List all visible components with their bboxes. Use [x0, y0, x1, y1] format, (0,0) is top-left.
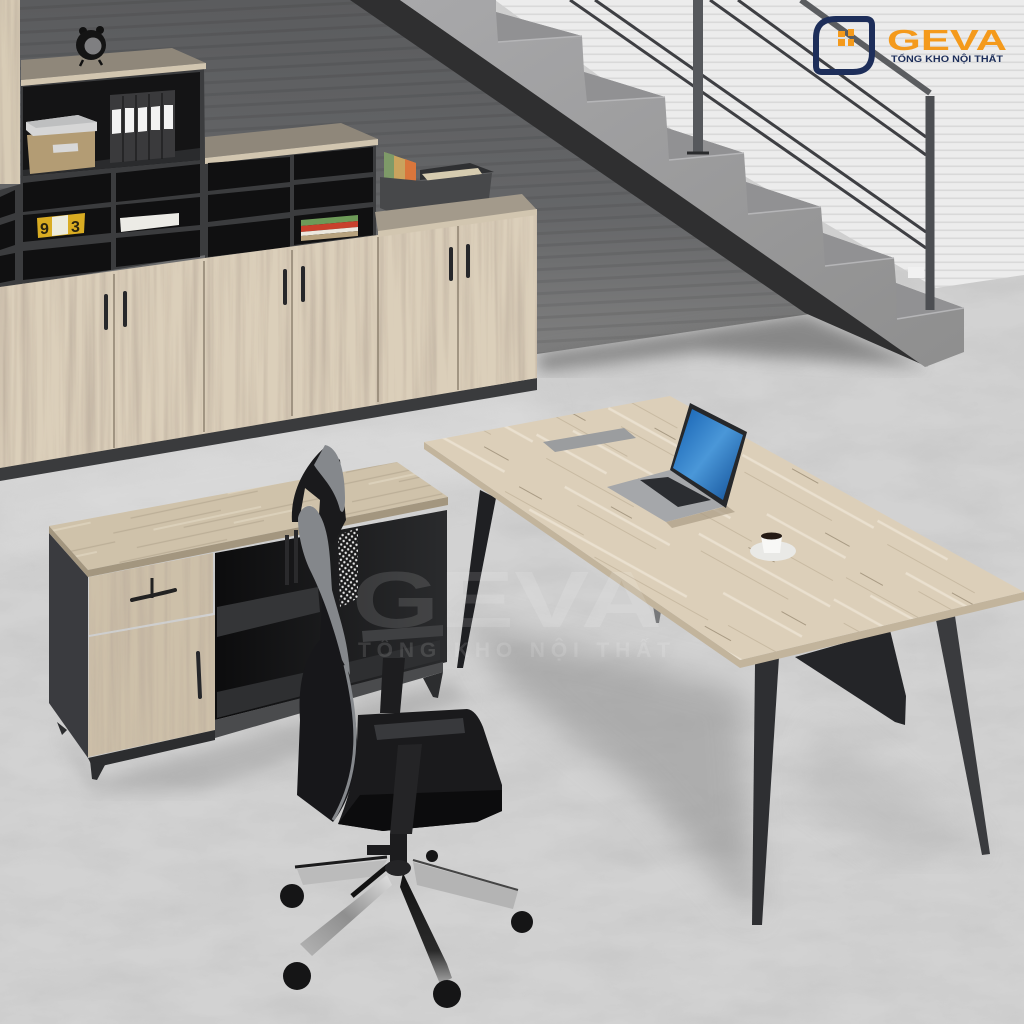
open top bay — [23, 72, 200, 176]
tall wood side panel — [0, 0, 20, 184]
bay floor — [23, 148, 200, 176]
storage box — [26, 115, 97, 174]
right leg — [413, 862, 518, 909]
drawer — [89, 553, 213, 635]
shelf unit middle — [205, 123, 378, 258]
laptop base — [607, 470, 726, 522]
seat — [338, 709, 502, 831]
monitor clamp — [287, 530, 296, 585]
side cabinet — [49, 462, 470, 790]
feet — [57, 672, 443, 780]
back small leg — [653, 606, 662, 623]
cabinet floor shadow — [60, 680, 470, 790]
screen — [673, 409, 743, 500]
tread nosing highlights — [498, 36, 964, 319]
cabinet top right — [375, 194, 537, 232]
chair base — [295, 834, 518, 984]
alarm clock — [76, 26, 106, 66]
keyboard — [640, 477, 711, 507]
bay floor — [217, 640, 440, 718]
casters — [280, 850, 533, 1008]
left side panel — [49, 533, 88, 758]
wall outlet — [908, 267, 924, 278]
tray body — [380, 173, 492, 219]
upright magazines — [384, 152, 416, 185]
cable grommet — [543, 428, 636, 452]
lumbar back — [297, 585, 357, 822]
cabinet front — [0, 214, 537, 468]
door seams — [114, 226, 458, 448]
binders — [110, 90, 175, 163]
lock — [150, 578, 154, 598]
desktop — [424, 396, 1024, 660]
screen lid — [670, 403, 747, 508]
logo wordmark: GEVA — [887, 25, 1007, 57]
cabinet top right front edge — [378, 209, 537, 237]
stair treads — [496, 12, 964, 319]
digital counter — [37, 213, 85, 238]
shelf top — [21, 48, 206, 80]
headrest frame — [292, 447, 346, 545]
left leg — [297, 860, 387, 885]
middle shelf top — [205, 123, 378, 158]
stair railing — [570, 0, 930, 310]
stair stringer — [350, 0, 928, 367]
office chair — [280, 445, 533, 1008]
modesty panel — [795, 630, 906, 725]
front left leg — [300, 875, 392, 956]
backrest mesh — [298, 506, 350, 675]
upper pad — [362, 625, 443, 642]
middle shelf body — [205, 145, 376, 258]
wall: dark cladding under stairs — [0, 0, 810, 354]
desk shadow on floor — [470, 620, 985, 920]
digital counter: 9 — [40, 221, 49, 238]
books — [301, 215, 358, 241]
front leg — [400, 873, 452, 984]
desk — [424, 396, 1024, 925]
middle cubbies — [208, 147, 373, 257]
shelf unit left — [0, 26, 206, 288]
inner shelf — [217, 587, 320, 637]
laptop — [607, 403, 747, 528]
shadow beneath stairs — [537, 314, 925, 372]
arm pad — [374, 718, 465, 740]
middle shelf top front edge — [205, 139, 378, 164]
drawer handle — [132, 590, 175, 600]
door handles — [106, 246, 468, 328]
laptop shadow — [666, 506, 735, 528]
arm post — [390, 744, 422, 834]
bracket — [367, 845, 405, 855]
right leg — [936, 616, 990, 855]
back rim — [333, 665, 355, 820]
desk edge — [424, 442, 1024, 668]
shelf body — [0, 68, 206, 288]
tray interior — [420, 163, 494, 180]
stacked white book — [120, 213, 179, 232]
long wood cabinet — [0, 194, 537, 481]
door handle — [198, 653, 200, 697]
floor — [0, 270, 1024, 1024]
upright spine — [380, 658, 405, 713]
cubbies — [0, 164, 200, 283]
door — [88, 615, 215, 757]
grey storage tray with magazines — [380, 152, 494, 219]
watermark: GEVA — [352, 555, 662, 644]
headrest — [314, 445, 345, 512]
stair body — [400, 0, 964, 367]
shelf top front edge — [21, 63, 206, 86]
logo squares — [838, 29, 854, 46]
cabinet plinth — [0, 378, 537, 481]
open bay — [215, 510, 447, 720]
wall: white cladding — [495, 0, 1024, 288]
coffee cup and saucer — [750, 532, 796, 561]
hub — [385, 860, 411, 876]
gas lift — [390, 834, 407, 870]
logo tagline: TỔNG KHO NỘI THẤT — [891, 53, 1004, 64]
watermark — [352, 555, 670, 662]
cabinet top edge — [49, 497, 448, 577]
staircase — [350, 0, 964, 367]
papers — [422, 168, 482, 181]
back left leg — [457, 490, 496, 668]
logo — [816, 19, 1007, 72]
watermark: TỔNG KHO NỘI THẤT — [358, 638, 670, 662]
front leg — [752, 657, 779, 925]
perforated panel — [338, 528, 358, 608]
digital counter: 3 — [71, 219, 80, 236]
logo mark — [816, 19, 872, 72]
base rail — [88, 730, 215, 768]
cabinet top — [49, 462, 448, 570]
seat front shade — [338, 790, 502, 831]
